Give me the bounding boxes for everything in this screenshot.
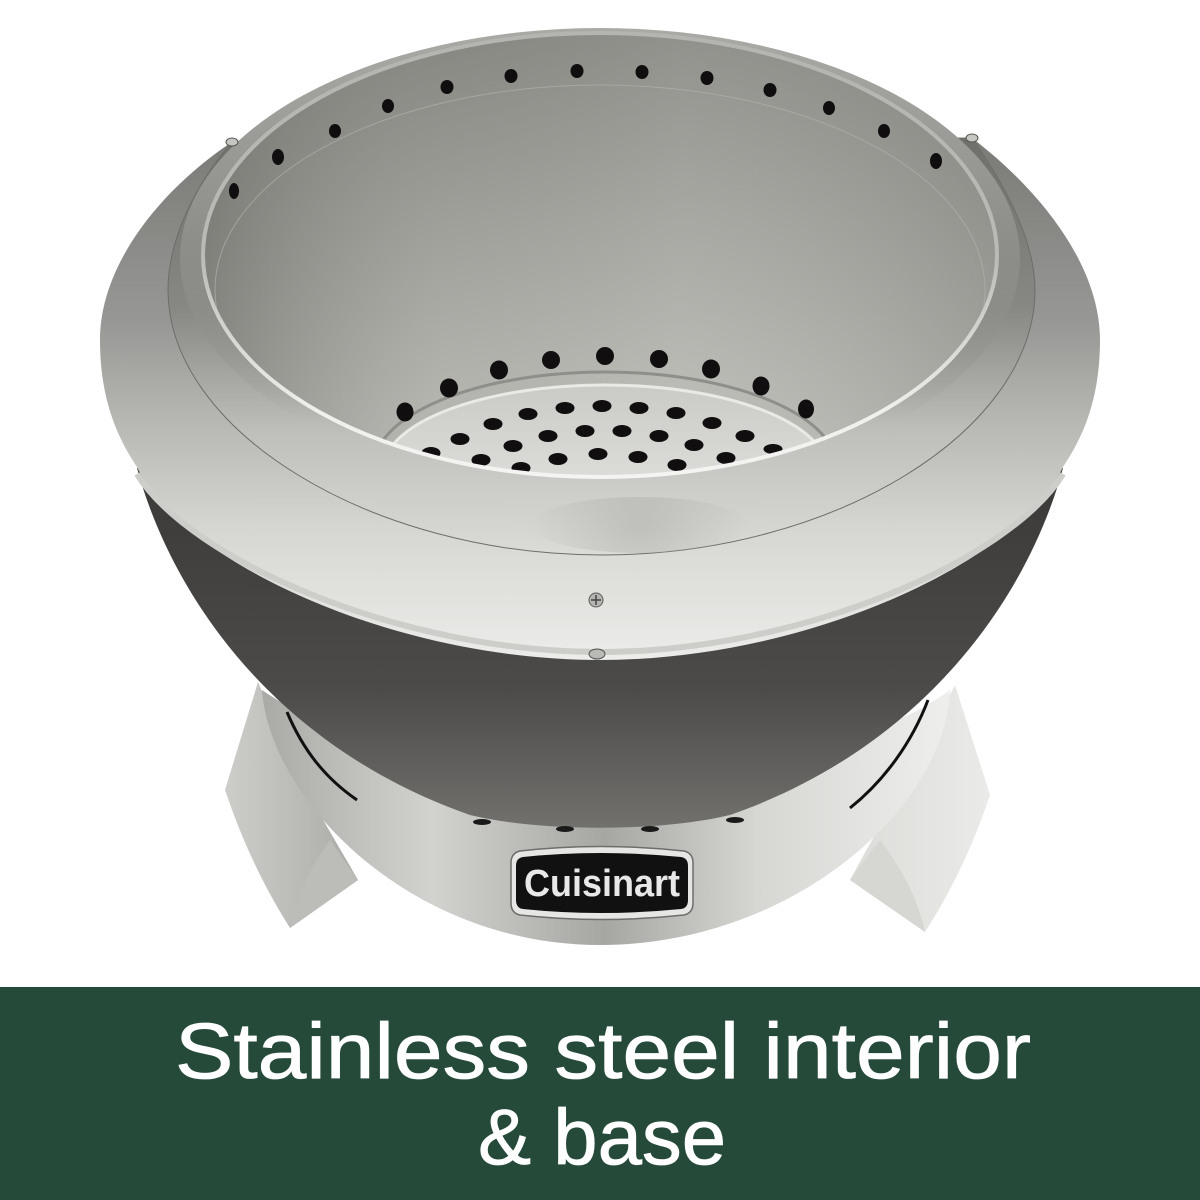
right leg bbox=[850, 685, 990, 932]
interior contents bbox=[214, 64, 986, 475]
upper wall holes bbox=[229, 64, 942, 199]
upper wall groove bbox=[214, 84, 986, 308]
screw left bbox=[226, 138, 238, 146]
perforated floor bbox=[396, 386, 812, 475]
Cuisinart badge bbox=[511, 846, 693, 920]
raised collar bbox=[168, 138, 1035, 555]
upper lip bbox=[180, 28, 1020, 488]
base ring bbox=[262, 690, 950, 945]
right base slot bbox=[850, 700, 928, 808]
inner lip bbox=[203, 33, 997, 477]
caption line 2: & base bbox=[478, 1092, 726, 1181]
screw front lower bbox=[589, 649, 605, 659]
rim lower edge highlight bbox=[137, 474, 1063, 652]
bowl lower vent holes bbox=[473, 817, 744, 832]
caption band bbox=[0, 987, 1200, 1200]
dark bowl body bbox=[137, 468, 1063, 828]
left base slot bbox=[287, 712, 357, 800]
interior wall bbox=[203, 33, 997, 477]
interior side shading bbox=[203, 33, 997, 477]
left leg bbox=[225, 682, 358, 928]
collar shading bbox=[530, 497, 750, 553]
floor rim bbox=[393, 384, 814, 444]
outer steel rim bbox=[100, 138, 1100, 660]
Cuisinart badge: Cuisinart bbox=[524, 863, 680, 905]
floor holes bbox=[422, 400, 782, 474]
screw right bbox=[966, 134, 978, 142]
floor groove bbox=[382, 370, 826, 440]
screw front upper bbox=[589, 593, 603, 607]
caption line 1: Stainless steel interior bbox=[175, 1006, 1031, 1095]
fire pit product bbox=[100, 28, 1100, 945]
lower wall holes bbox=[396, 347, 814, 422]
